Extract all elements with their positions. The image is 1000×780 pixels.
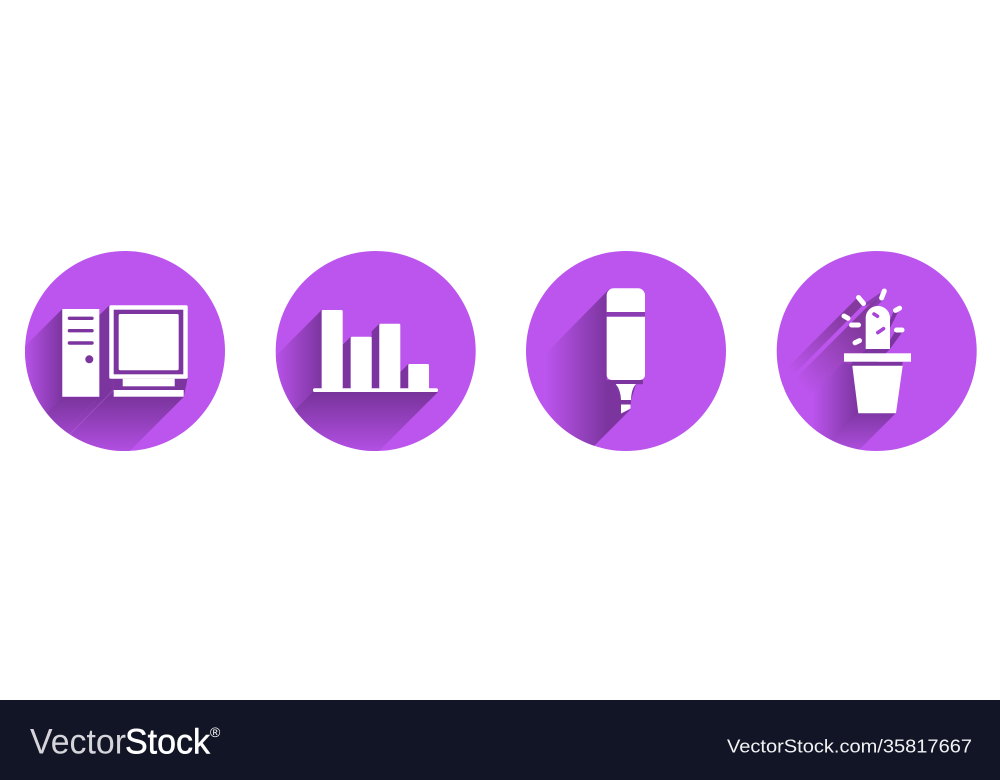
footer bar xyxy=(0,700,1000,780)
monitor xyxy=(109,305,188,397)
cactus plant xyxy=(866,306,890,349)
image id: VectorStock.com/35817667 xyxy=(727,736,972,757)
badge circle: bar chart xyxy=(276,251,476,451)
marker body xyxy=(607,288,645,414)
logo wordmark: ® xyxy=(210,724,221,740)
icon: potted cactus xyxy=(776,251,977,451)
logo wordmark xyxy=(30,722,221,762)
icon: marker pen xyxy=(526,251,726,451)
long shadow: bar chart xyxy=(276,310,438,451)
logo wordmark: Vector xyxy=(30,722,126,762)
long shadow: cactus xyxy=(780,293,903,450)
badge circle: computer xyxy=(25,251,225,451)
flower pot xyxy=(844,353,911,413)
chart baseline xyxy=(313,388,438,392)
badge circle: cactus xyxy=(777,251,977,451)
icon: computer xyxy=(25,251,225,451)
bars xyxy=(322,310,429,389)
icon: bar chart xyxy=(276,251,476,451)
cactus spines xyxy=(844,291,902,343)
tower case xyxy=(62,309,99,397)
long shadow: marker xyxy=(528,288,645,446)
logo wordmark: Stock xyxy=(125,722,210,762)
badge circle: marker xyxy=(526,251,726,451)
long shadow: computer xyxy=(25,305,188,451)
infographic canvas xyxy=(0,251,1000,780)
